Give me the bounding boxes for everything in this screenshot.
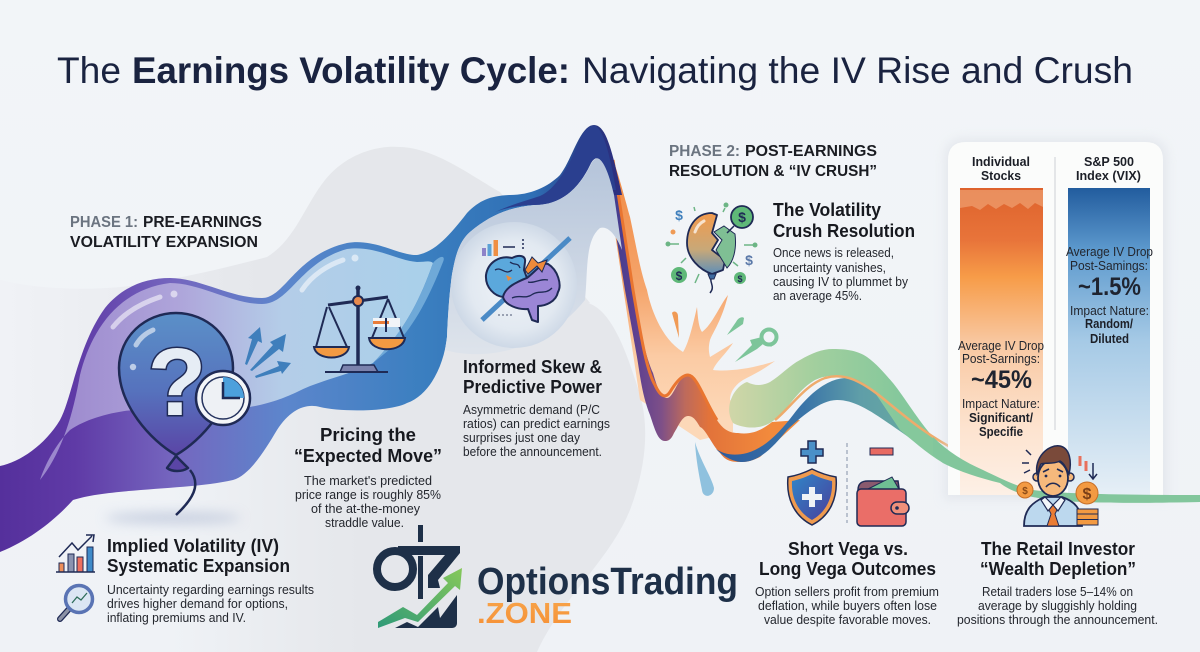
text: volatility crush resolution: causing IV to plummet by <box>773 275 909 289</box>
wave: light inner volume <box>40 248 433 480</box>
panel: comparison table <box>944 138 1168 500</box>
logo mark <box>377 525 462 628</box>
text: volatility crush resolution: Once news is released, <box>773 246 894 260</box>
background blob: upper gray <box>0 147 590 470</box>
heading: phase 1 <box>70 214 262 251</box>
column text: individual stocks: Significant/ <box>969 410 1033 425</box>
panel: comparison table: Stocks <box>981 168 1021 183</box>
icon: bursting balloon with dollars: $ <box>738 209 746 225</box>
falling wave: blue and teal band <box>716 378 968 472</box>
column text: individual stocks <box>958 338 1044 439</box>
text: implied volatility: Implied Volatility (IV) <box>107 536 279 556</box>
icon: bursting balloon with dollars: $ <box>675 207 683 223</box>
logo: options trading zone: OptionsTrading <box>477 561 738 603</box>
text: short vega vs long vega: deflation, while buyers often lose <box>758 599 937 613</box>
heading: phase 1: PHASE 1: <box>70 214 138 231</box>
text: informed skew: surprises just one day <box>463 431 581 445</box>
logo: options trading zone: .ZONE <box>477 598 572 630</box>
text: pricing the expected move: “Expected Move” <box>294 446 442 466</box>
logo: options trading zone <box>377 525 738 630</box>
text: informed skew: ratios) can predict earnings <box>463 417 610 431</box>
heading: phase 2: POST-EARNINGS <box>745 143 877 160</box>
text: informed skew: Informed Skew & <box>463 357 602 377</box>
heading: phase 2: PHASE 2: <box>669 143 740 160</box>
wave highlights <box>113 254 358 327</box>
text: short vega vs long vega: Long Vega Outcomes <box>759 559 936 579</box>
icon: question mark balloon with clock: ? <box>148 329 206 436</box>
text: implied volatility: Uncertainty regarding earnings results <box>107 583 314 597</box>
text: volatility crush resolution: uncertainty vanishes, <box>773 261 886 275</box>
text: short vega vs long vega: value despite favorable moves. <box>764 613 931 627</box>
text: retail investor wealth depletion: “Wealth Depletion” <box>980 559 1136 579</box>
wave: pale interior under band <box>445 159 622 354</box>
heading: phase 1: VOLATILITY EXPANSION <box>70 234 258 251</box>
text: pricing the expected move: Pricing the <box>320 425 416 445</box>
green tail over panel <box>933 437 1200 503</box>
heading: phase 2 <box>669 143 877 180</box>
wave: light circle behind brain <box>451 222 577 348</box>
icon: wallet <box>857 477 909 526</box>
column text: individual stocks: ~45% <box>971 366 1032 394</box>
text: informed skew: Asymmetric demand (P/C <box>463 403 600 417</box>
falling wave: thin orange line on green <box>775 376 960 452</box>
text: informed skew: before the announcement. <box>463 445 602 459</box>
heading: phase 2: RESOLUTION & “IV CRUSH” <box>669 163 877 180</box>
text: short vega vs long vega: Option sellers profit from premium <box>755 585 939 599</box>
text: volatility crush resolution: Crush Resolution <box>773 221 915 241</box>
wave: top band navy peak <box>495 126 616 212</box>
column text: s&p 500: Post-Samings: <box>1070 258 1148 273</box>
text: retail investor wealth depletion <box>957 539 1158 627</box>
panel: comparison table: Individual <box>972 154 1030 169</box>
icon: bursting balloon with dollars: $ <box>745 252 753 268</box>
text: retail investor wealth depletion: average by sluggishly holding <box>978 599 1137 613</box>
icon: worried retail investor: $ <box>1022 486 1028 497</box>
icon: worried retail investor <box>1017 446 1098 526</box>
column text: s&p 500: ~1.5% <box>1078 273 1141 301</box>
icon: balance scales <box>314 286 405 372</box>
splash fragments <box>672 312 776 496</box>
text: informed skew <box>463 357 610 459</box>
icon: worried retail investor: $ <box>1083 486 1092 503</box>
falling wave: purple to orange band <box>600 140 800 462</box>
icon: bursting balloon with dollars <box>666 202 758 293</box>
text: retail investor wealth depletion: Retail traders lose 5–14% on <box>982 585 1133 599</box>
text: retail investor wealth depletion: positions through the announcement. <box>957 613 1158 627</box>
column text: individual stocks: Specifie <box>979 424 1023 439</box>
icon: bursting balloon with dollars: $ <box>676 269 683 283</box>
text: pricing the expected move: of the at-the-money <box>311 502 421 516</box>
panel: comparison table: Index (VIX) <box>1076 168 1141 183</box>
falling wave: green tail <box>729 349 1200 503</box>
column text: s&p 500: Impact Nature: <box>1070 303 1149 318</box>
text: volatility crush resolution: an average 45%. <box>773 289 862 303</box>
text: informed skew: Predictive Power <box>463 377 602 397</box>
text: retail investor wealth depletion: The Retail Investor <box>981 539 1135 559</box>
text: implied volatility: inflating premiums and IV. <box>107 611 246 625</box>
text: short vega vs long vega: Short Vega vs. <box>788 539 908 559</box>
text: pricing the expected move: The market's predicted <box>304 474 432 488</box>
icon: magnifying glass <box>60 586 92 619</box>
text: pricing the expected move: straddle value. <box>325 516 404 530</box>
column text: s&p 500 <box>1066 244 1153 346</box>
column text: individual stocks: Impact Nature: <box>962 396 1040 411</box>
text: volatility crush resolution: The Volatility <box>773 200 881 220</box>
wave body: purple to blue rising wave <box>0 125 622 552</box>
icon: question mark balloon with clock <box>105 313 250 524</box>
icon: brain with mini chart <box>482 238 570 322</box>
title <box>57 50 1133 91</box>
wave: lighter blue stripe <box>373 257 444 363</box>
background blob: lower gray <box>170 303 645 652</box>
text: implied volatility: drives higher demand for options, <box>107 597 288 611</box>
falling wave: thin orange stripe <box>613 160 717 420</box>
icon: shield with plus <box>788 469 836 525</box>
column text: s&p 500: Average IV Drop <box>1066 244 1153 259</box>
heading: phase 1: PRE-EARNINGS <box>143 214 262 231</box>
icon: bursting balloon with dollars: $ <box>737 274 743 284</box>
icon: minus sign <box>870 448 893 455</box>
text: pricing the expected move <box>294 425 442 530</box>
title: Navigating the IV Rise and Crush <box>582 50 1133 91</box>
text: implied volatility: Systematic Expansion <box>107 556 290 576</box>
icon: three rising arrows <box>245 327 291 378</box>
icon: bar chart with rising line <box>56 535 95 572</box>
column text: s&p 500: Diluted <box>1090 331 1129 346</box>
column text: s&p 500: Random/ <box>1085 316 1133 331</box>
column text: individual stocks: Average IV Drop <box>958 338 1044 353</box>
panel: comparison table: S&P 500 <box>1084 154 1134 169</box>
column text: individual stocks: Post-Sarnings: <box>962 351 1040 366</box>
title: Earnings Volatility Cycle: <box>132 50 570 91</box>
icon: plus sign <box>801 441 823 463</box>
text: volatility crush resolution <box>773 200 915 303</box>
text: short vega vs long vega <box>755 539 939 627</box>
text: implied volatility <box>107 536 314 625</box>
falling wave: orange edge and peach splash <box>596 126 775 440</box>
text: pricing the expected move: price range is roughly 85% <box>295 488 441 502</box>
title: The <box>57 50 121 91</box>
divider dashed <box>846 443 848 523</box>
